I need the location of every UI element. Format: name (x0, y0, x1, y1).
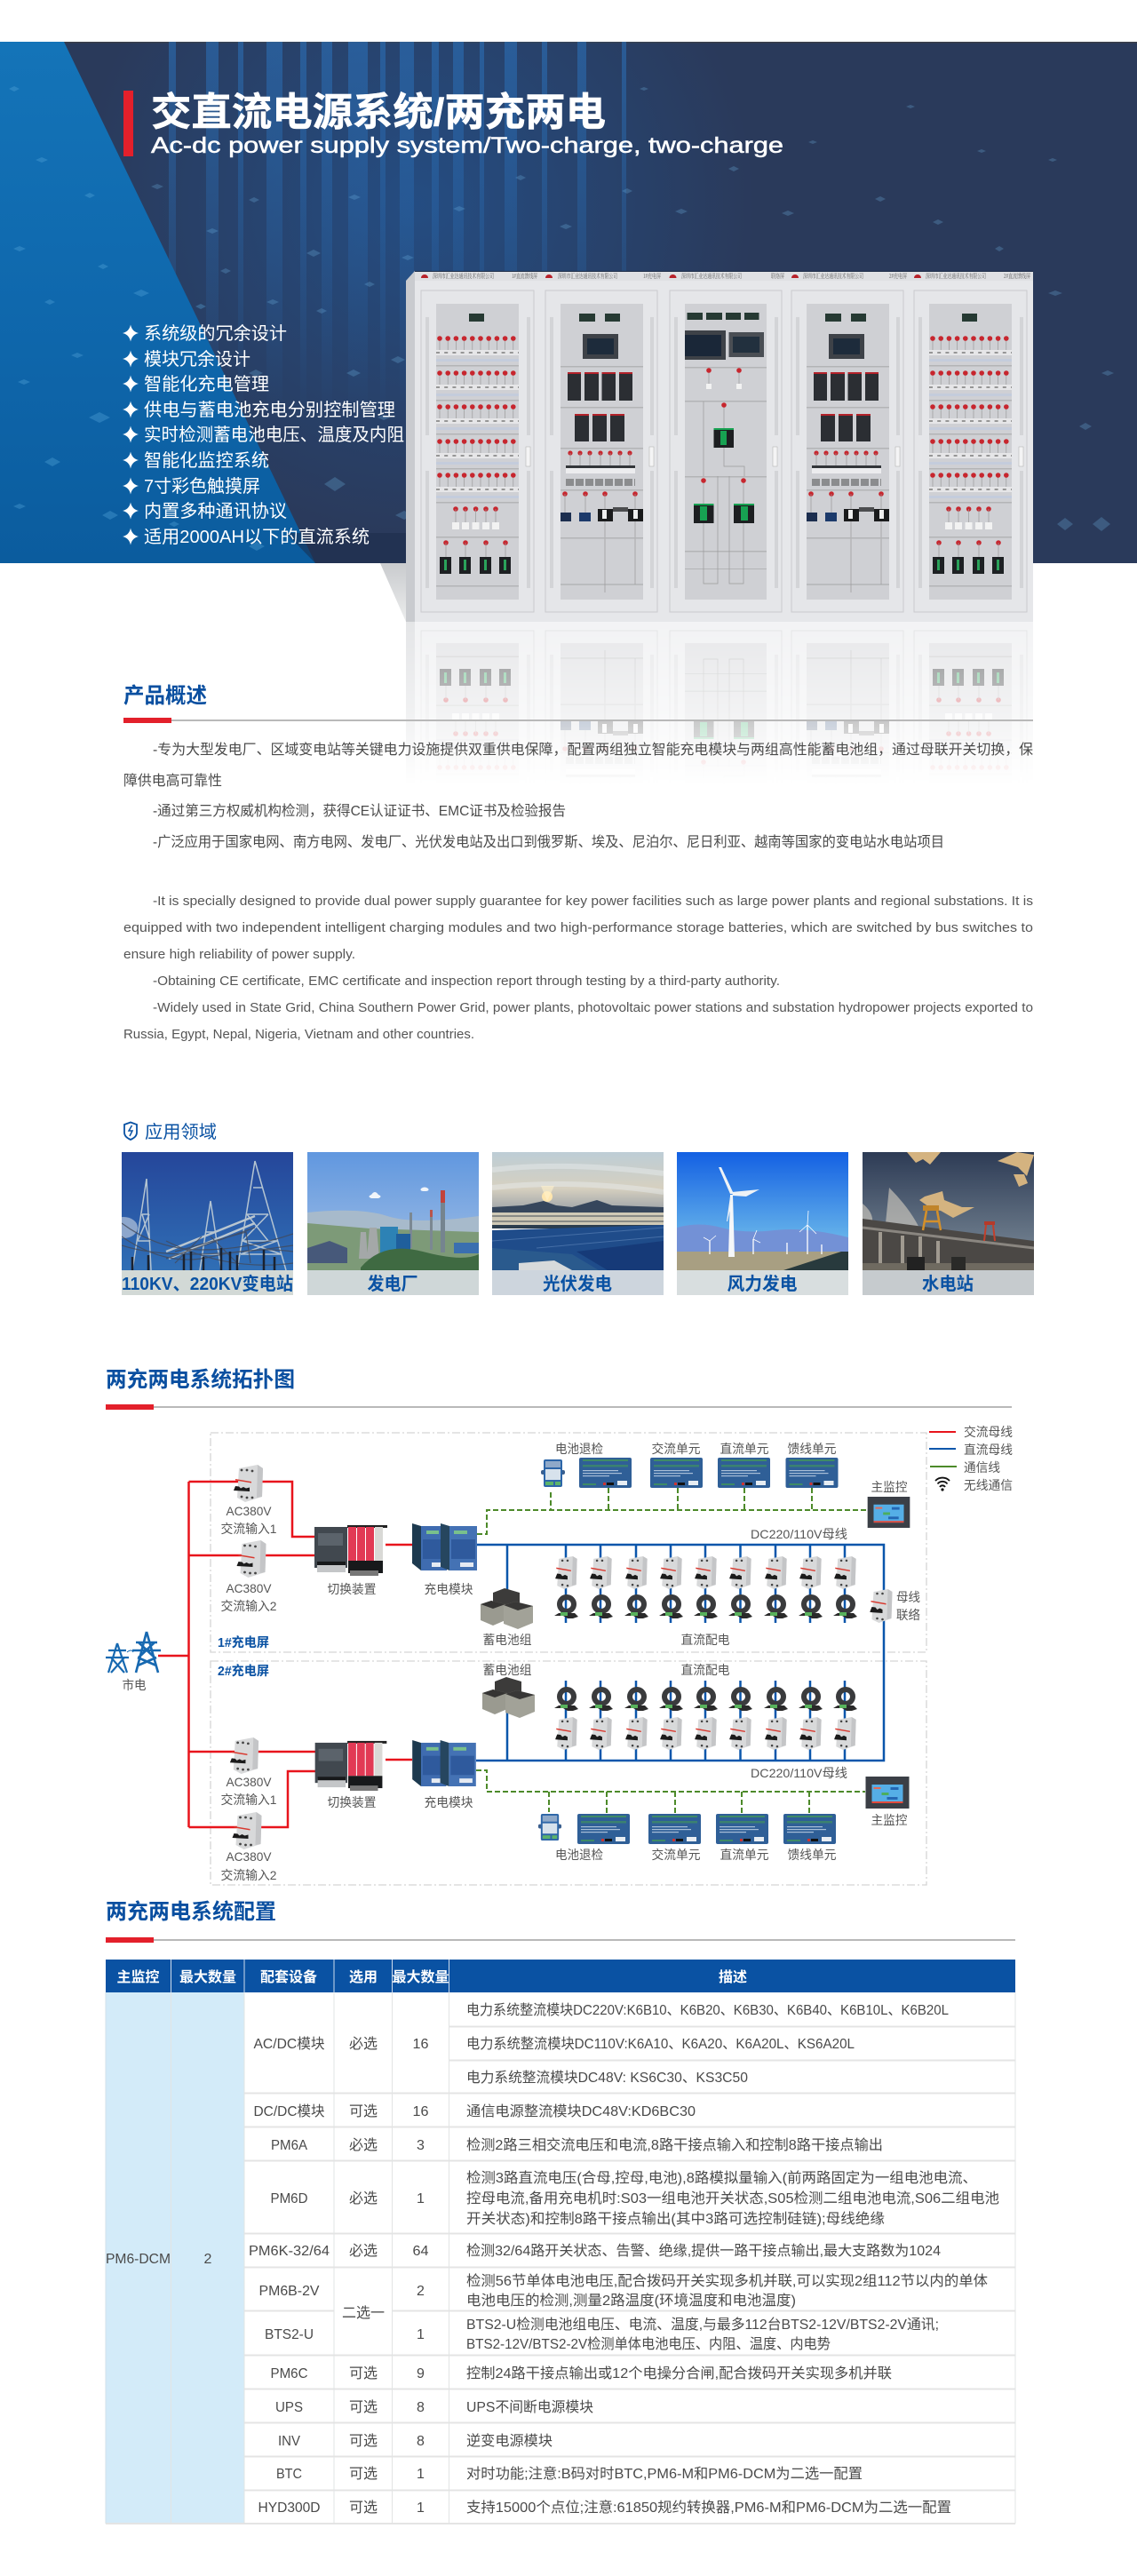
overview text: English: Russia, Egypt, Nepal, Nigeria, Vietnam and other countries. (123, 1027, 474, 1042)
row: AC/DC module: 电力系统整流模块DC48V: KS6C30、KS3C50 (466, 2070, 748, 2086)
row: PM6A: 3 (417, 2138, 425, 2153)
row: HYD300D: 1 (417, 2500, 425, 2516)
AC input breakers, screen 1 (220, 1465, 277, 1613)
row: HYD300D: HYD300D (258, 2500, 320, 2516)
overview text: English: -Obtaining CE certificate, EMC certificate and inspection report through testing by a third-party authority. (153, 974, 780, 989)
monitoring units, screen 1: 馈线单元 (787, 1442, 837, 1456)
main monitor cell: PM6-DCM (106, 2252, 171, 2267)
transfer switch, screen 2: 切换装置 (327, 1795, 377, 1809)
monitoring units, screen 2: 电池退检 (555, 1848, 603, 1862)
title accent bar (123, 91, 133, 156)
transfer switch, screen 2 (315, 1741, 386, 1809)
label: screen 1: 1#充电屏 (218, 1634, 269, 1650)
DC distribution, screen 2: DC220/110V母线 (751, 1766, 847, 1780)
overview text: English (123, 894, 1033, 1042)
row: UPS: UPS不间断电源模块 (466, 2399, 593, 2415)
cabinet nameplates: 深圳市汇业达通讯技术有限公司 (926, 272, 986, 280)
cabinet nameplates: 2#充电屏 (889, 272, 907, 280)
DC bus lines (476, 1545, 884, 1761)
hero banner (0, 42, 1137, 563)
photo captions: 发电厂 (368, 1274, 417, 1294)
row: DC/DC module (254, 2103, 696, 2119)
transfer switch, screen 1: 切换装置 (327, 1582, 377, 1596)
row: PM6B-2V: 检测56节单体电池电压,配合拨码开关实现多机并联,可以实现2组112节以内的单体 (466, 2273, 988, 2289)
row: BTC: 可选 (349, 2466, 378, 2482)
DC distribution, screen 1 (554, 1527, 857, 1647)
row: PM6D: 1 (417, 2191, 425, 2206)
feature list: 智能化监控系统 (144, 450, 269, 471)
row: PM6K-32/64: 检测32/64路开关状态、告警、绝缘,提供一路干接点输出,最大支路数为1024 (466, 2243, 941, 2259)
monitoring units, screen 2: 交流单元 (652, 1848, 700, 1862)
cabinet nameplates: 深圳市汇业达通讯技术有限公司 (558, 272, 617, 280)
title: 交直流电源系统/两充两电 (151, 91, 606, 134)
row: HYD300D: 支持15000个点位;注意:61850规约转换器,PM6-M和PM6-DCM为二选一配置 (466, 2499, 951, 2516)
row: HYD300D: 可选 (349, 2500, 378, 2516)
feature list: 系统级的冗余设计 (144, 323, 287, 344)
row: PM6D (270, 2170, 999, 2227)
overview text: English: equipped with two independent intelligent charging modules and two high-performance storage batteries, which are switched by bus switches to (123, 920, 1033, 935)
table header: 最大数量 (392, 1969, 449, 1985)
AC input breakers, screen 2: 交流输入1 (220, 1793, 277, 1807)
row: INV: 逆变电源模块 (466, 2433, 553, 2449)
panel: charging screen 1 (211, 1433, 926, 1652)
overview text: English: -It is specially designed to provide dual power supply guarantee for key power facilities such as large power plants and regional substations. It is (153, 894, 1033, 909)
overview text: Chinese: -通过第三方权威机构检测，获得CE认证证书、EMC证书及检验报告 (153, 803, 566, 819)
cabinet nameplates (421, 272, 1030, 280)
cabinet drop shadow (380, 563, 406, 622)
bus tie breaker: 母线 (896, 1590, 920, 1604)
main monitor, screen 1 (868, 1480, 910, 1528)
topology diagram (106, 1425, 1013, 1885)
overview text: English: ensure high reliability of power supply. (123, 947, 355, 962)
row: PM6C: 可选 (349, 2365, 378, 2381)
row: BTS2-U: BTS2-12V/BTS2-2V检测单体电池电压、内阻、温度、内电势 (466, 2336, 831, 2352)
cabinet nameplates: 深圳市汇业达通讯技术有限公司 (433, 272, 494, 280)
charging modules, screen 2: 充电模块 (425, 1795, 473, 1809)
row: PM6D: 必选 (349, 2190, 378, 2206)
row: PM6A (271, 2137, 883, 2153)
row: BTS2-U: BTS2-U (265, 2327, 314, 2342)
photo card: power plant (307, 1152, 479, 1295)
icon: shield with bolt (124, 1123, 137, 1140)
feature list (123, 323, 404, 547)
main monitor, screen 2 (865, 1777, 910, 1827)
DC distribution, screen 1: DC220/110V母线 (751, 1527, 847, 1541)
monitoring units, screen 1: 电池退检 (555, 1442, 603, 1456)
row: PM6B-2V: 2 (417, 2284, 425, 2299)
row: BTS2-U: BTS2-U检测电池组电压、电流、温度,与最多112台BTS2-12V/BTS2-2V通讯; (466, 2317, 939, 2333)
cabinet nameplates: 深圳市汇业达通讯技术有限公司 (803, 272, 863, 280)
charging modules, screen 1: 充电模块 (425, 1582, 473, 1596)
panel: charging screen 2 (211, 1661, 926, 1885)
legend: 直流母线 (964, 1443, 1013, 1457)
photo captions (122, 1270, 1034, 1295)
monitoring units, screen 1: 交流单元 (652, 1442, 700, 1456)
monitoring units, screen 2: 馈线单元 (787, 1848, 837, 1862)
AC input breakers, screen 1: 交流输入1 (220, 1522, 277, 1536)
heading: topology: 两充两电系统拓扑图 (106, 1368, 295, 1392)
heading: product overview: 产品概述 (123, 684, 207, 708)
overview text: Chinese (123, 742, 1033, 850)
row: BTC: BTC (276, 2467, 302, 2482)
legend (929, 1425, 1013, 1492)
photo card: wind power (677, 1152, 848, 1295)
bus tie breaker: 联络 (896, 1608, 920, 1622)
AC input breakers, screen 2: 交流输入2 (220, 1868, 277, 1882)
row: HYD300D (258, 2499, 951, 2516)
feature list: 模块冗余设计 (144, 349, 250, 370)
heading: configuration: 两充两电系统配置 (106, 1900, 276, 1924)
table header: 描述 (719, 1969, 747, 1985)
AC input breakers, screen 2: AC380V (226, 1849, 272, 1864)
row: INV: 8 (417, 2434, 425, 2449)
row: PM6D: 开关状态)和控制8路干接点输出(其中3路可选控制硅链);母线绝缘 (466, 2211, 885, 2227)
feature list: 实时检测蓄电池电压、温度及内阻 (144, 425, 404, 445)
row: BTC: 1 (417, 2467, 425, 2482)
cabinet nameplates: 深圳市汇业达通讯技术有限公司 (681, 272, 742, 280)
table header (106, 1960, 1015, 1992)
main monitor, screen 2: 主监控 (871, 1813, 908, 1827)
photo captions: 110KV、220KV变电站 (122, 1273, 293, 1294)
AC input breakers, screen 1: 交流输入2 (220, 1599, 277, 1613)
row: AC/DC module: AC/DC模块 (254, 2036, 325, 2052)
photo captions: 风力发电 (727, 1274, 798, 1294)
row: PM6C: PM6C (270, 2366, 307, 2381)
photo captions: 光伏发电 (543, 1273, 612, 1294)
row: UPS: 8 (417, 2400, 425, 2415)
DC distribution, screen 2 (554, 1663, 857, 1780)
heading: applications: 应用领域 (145, 1122, 217, 1142)
configuration underline (106, 1937, 1015, 1943)
overview text: Chinese: -专为大型发电厂、区域变电站等关键电力设施提供双重供电保障，配置两组独立智能充电模块与两组高性能蓄电池组，通过母联开关切换，保 (153, 742, 1033, 758)
choose-one cell: 二选一 (342, 2305, 385, 2321)
configuration table (106, 1960, 1015, 2524)
AC input breakers, screen 2: AC380V (226, 1775, 272, 1789)
legend: 通信线 (964, 1460, 1000, 1475)
monitoring units, screen 1: 直流单元 (720, 1442, 769, 1456)
row: UPS: UPS (275, 2400, 303, 2415)
row: PM6A: 检测2路三相交流电压和电流,8路干接点输入和控制8路干接点输出 (466, 2137, 883, 2153)
monitoring units, screen 2 (538, 1814, 837, 1862)
power cabinet line-up (406, 271, 1033, 622)
row: PM6B-2V: 电池电压的检测,测量2路温度(环境温度和电池温度) (466, 2292, 796, 2309)
row: AC/DC module: 必选 (349, 2036, 378, 2052)
row: AC/DC module (254, 2002, 949, 2086)
DC distribution, screen 1: 直流配电 (680, 1633, 730, 1647)
row: PM6K-32/64: 64 (412, 2244, 429, 2259)
row: PM6K-32/64: 必选 (349, 2243, 378, 2259)
AC input breakers, screen 2 (220, 1737, 277, 1882)
photo card: hydropower (863, 1152, 1034, 1295)
row: PM6D: PM6D (270, 2191, 307, 2206)
row: BTS2-U: 1 (417, 2327, 425, 2342)
table header: 最大数量 (179, 1969, 236, 1985)
legend: 无线通信 (964, 1478, 1013, 1492)
row: UPS: 可选 (349, 2399, 378, 2415)
row: PM6C (270, 2365, 892, 2381)
table body grid (106, 1992, 1015, 2524)
row: PM6C: 控制24路干接点输出或12个电操分合闸,配合拨码开关实现多机并联 (466, 2365, 892, 2381)
monitoring units, screen 1 (541, 1442, 839, 1488)
main monitor, screen 1: 主监控 (871, 1480, 908, 1494)
charging modules, screen 2 (412, 1740, 476, 1809)
communication lines (476, 1488, 867, 1814)
feature list: 供电与蓄电池充电分别控制管理 (144, 400, 395, 420)
row: INV: INV (278, 2434, 300, 2449)
row: PM6A: 必选 (349, 2137, 378, 2153)
topology underline (106, 1404, 1012, 1410)
overview underline (123, 718, 1033, 723)
row: PM6K-32/64: PM6K-32/64 (249, 2244, 330, 2259)
overview text: Chinese: -广泛应用于国家电网、南方电网、发电厂、光伏发电站及出口到俄罗斯、埃及、尼泊尔、尼日利亚、越南等国家的变电站水电站项目 (153, 833, 944, 850)
overview text: Chinese: 障供电高可靠性 (123, 773, 222, 789)
row: UPS (275, 2399, 593, 2415)
row: INV (278, 2433, 553, 2449)
row: DC/DC module: 通信电源整流模块DC48V:KD6BC30 (466, 2103, 696, 2119)
table header: 配套设备 (260, 1968, 317, 1985)
row: PM6C: 9 (417, 2366, 425, 2381)
feature list: 7寸彩色触摸屏 (144, 476, 260, 497)
icon: transmission towers (106, 1632, 161, 1673)
row: PM6D: 控母电流,备用充电机时:S03一组电池开关状态,S05检测二组电池电流,S06二组电池 (466, 2190, 999, 2206)
battery bank, screen 2 (482, 1663, 535, 1718)
max quantity cell: 2 (204, 2252, 212, 2267)
cabinet nameplates: 2#直流馈线屏 (1004, 272, 1030, 280)
bus tie breaker (871, 1589, 920, 1623)
AC bus lines (158, 1482, 412, 1827)
row: AC/DC module: 电力系统整流模块DC220V:K6B10、K6B20、K6B30、K6B40、K6B10L、K6B20L (466, 2002, 949, 2018)
battery bank, screen 1 (481, 1588, 533, 1647)
row: PM6A: PM6A (271, 2138, 307, 2153)
row: BTC (276, 2465, 863, 2482)
label: mains: 市电 (123, 1678, 146, 1692)
feature list: 适用2000AH以下的直流系统 (144, 527, 370, 547)
row: DC/DC module: 16 (412, 2104, 429, 2119)
row: PM6D: 检测3路直流电压(合母,控母,电池),8路模拟量输入(前两路固定为一组电池电流、 (466, 2170, 977, 2186)
charging modules, screen 1 (412, 1523, 477, 1596)
table header: 选用 (349, 1969, 378, 1985)
row: DC/DC module: DC/DC模块 (254, 2103, 325, 2119)
cabinet nameplates: 1#充电屏 (643, 272, 661, 280)
AC input breakers, screen 1: AC380V (226, 1504, 272, 1518)
photo captions: 水电站 (922, 1274, 974, 1294)
feature list: 内置多种通讯协议 (144, 501, 287, 521)
overview text: English: -Widely used in State Grid, China Southern Power Grid, power plants, photovoltaic power stations and substation hydropower projects exported to (153, 1000, 1033, 1015)
row: AC/DC module: 16 (412, 2037, 429, 2052)
cabinet nameplates: 1#直流馈线屏 (512, 272, 537, 280)
monitoring units, screen 2: 直流单元 (720, 1848, 769, 1862)
label: screen 2: 2#充电屏 (218, 1663, 269, 1679)
subtitle: Ac-dc power supply system/Two-charge, two-charge (151, 133, 783, 158)
row: AC/DC module: 电力系统整流模块DC110V:K6A10、K6A20、K6A20L、KS6A20L (466, 2036, 855, 2052)
row: PM6B-2V: PM6B-2V (259, 2284, 320, 2299)
transfer switch, screen 1 (314, 1525, 387, 1596)
photo card: substation (109, 1152, 293, 1295)
legend: 交流母线 (964, 1425, 1013, 1439)
row: INV: 可选 (349, 2433, 378, 2449)
AC input breakers, screen 1: AC380V (226, 1581, 272, 1595)
row: PM6K-32/64 (249, 2243, 941, 2259)
row: PM6B-2V (259, 2273, 988, 2309)
row: DC/DC module: 可选 (349, 2103, 378, 2119)
feature list: 智能化充电管理 (144, 374, 269, 394)
cabinet floor reflection (406, 622, 1033, 775)
photo card: solar farm (492, 1152, 664, 1295)
row: BTS2-U (265, 2317, 939, 2352)
cabinet nameplates: 联络屏 (771, 272, 784, 280)
table header: 主监控 (116, 1968, 160, 1985)
row: BTC: 对时功能;注意:B码对时BTC,PM6-M和PM6-DCM为二选一配置 (466, 2465, 863, 2482)
battery bank, screen 2: 蓄电池组 (483, 1663, 531, 1677)
DC distribution, screen 2: 直流配电 (680, 1663, 730, 1677)
battery bank, screen 1: 蓄电池组 (483, 1633, 531, 1647)
